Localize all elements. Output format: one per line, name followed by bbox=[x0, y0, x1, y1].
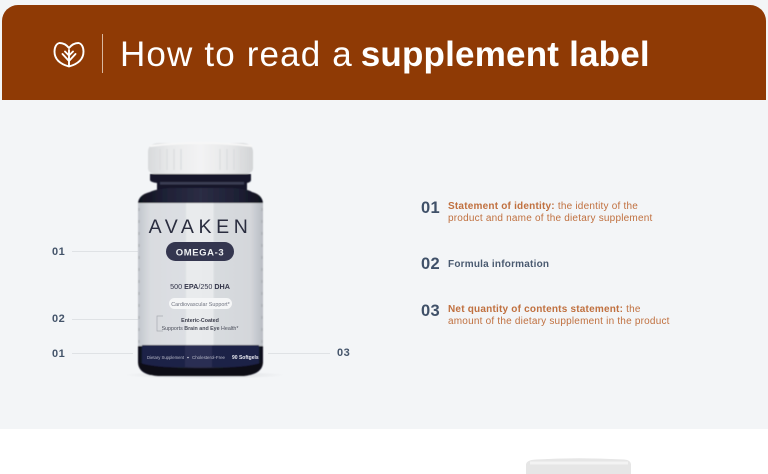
bottle illustration bbox=[137, 143, 264, 378]
dark label band bbox=[142, 345, 259, 367]
callout line: 01 bottom bbox=[72, 353, 133, 354]
callout label: 01 top: 01 bbox=[52, 246, 65, 258]
shoulder and body bbox=[138, 188, 263, 375]
neck bbox=[150, 174, 251, 192]
item 03 description bbox=[448, 304, 670, 327]
product name: OMEGA-3 bbox=[176, 248, 224, 258]
dosage: 500 EPA/250 DHA bbox=[170, 282, 230, 291]
callout line: 01 top bbox=[72, 251, 138, 252]
callout label: 01 bottom: 01 bbox=[52, 348, 65, 360]
item 01 description bbox=[448, 201, 652, 224]
bottle illustration: Supports Brain and Eye Health* bbox=[162, 326, 238, 332]
label side marks bbox=[139, 208, 262, 345]
divider in banner bbox=[102, 34, 103, 73]
item 02 description: Formula information bbox=[448, 259, 549, 270]
callout label: 03 right: 03 bbox=[337, 347, 350, 359]
callout line: 03 right bbox=[268, 353, 330, 354]
benefit pill bbox=[169, 298, 232, 309]
item 02 number: 02 bbox=[421, 255, 440, 273]
item 03 description: amount of the dietary supplement in the product bbox=[448, 316, 670, 327]
item 01 description: Statement of identity: the identity of the bbox=[448, 201, 638, 212]
benefit text: Cardiovascular Support* bbox=[171, 302, 231, 308]
feature text: Enteric-Coated bbox=[181, 318, 219, 324]
brand name: AVAKEN bbox=[149, 216, 252, 238]
callout label: 02 left: 02 bbox=[52, 313, 65, 325]
cap bbox=[148, 143, 253, 174]
title: How to read a supplement label bbox=[120, 35, 650, 74]
bottle illustration: 90 Softgels bbox=[232, 355, 259, 361]
paper label bbox=[138, 203, 263, 346]
bracket bbox=[157, 316, 163, 331]
item 01 description: product and name of the dietary supplement bbox=[448, 213, 652, 224]
bottle shadow bbox=[125, 371, 285, 379]
item 03 description: Net quantity of contents statement: the bbox=[448, 304, 641, 315]
bottle base bbox=[138, 362, 263, 376]
callout line: 02 left bbox=[72, 319, 157, 320]
next section: second bottle cap, cropped bbox=[526, 458, 631, 474]
bottle illustration: Cholesterol-Free bbox=[192, 355, 225, 361]
product pill bbox=[166, 242, 234, 261]
item 03 number: 03 bbox=[421, 302, 440, 320]
panel: title banner bbox=[2, 5, 766, 100]
band text: Dietary Supplement bbox=[147, 355, 185, 361]
icon: leaf logo bbox=[54, 42, 84, 68]
item 01 number: 01 bbox=[421, 199, 440, 217]
